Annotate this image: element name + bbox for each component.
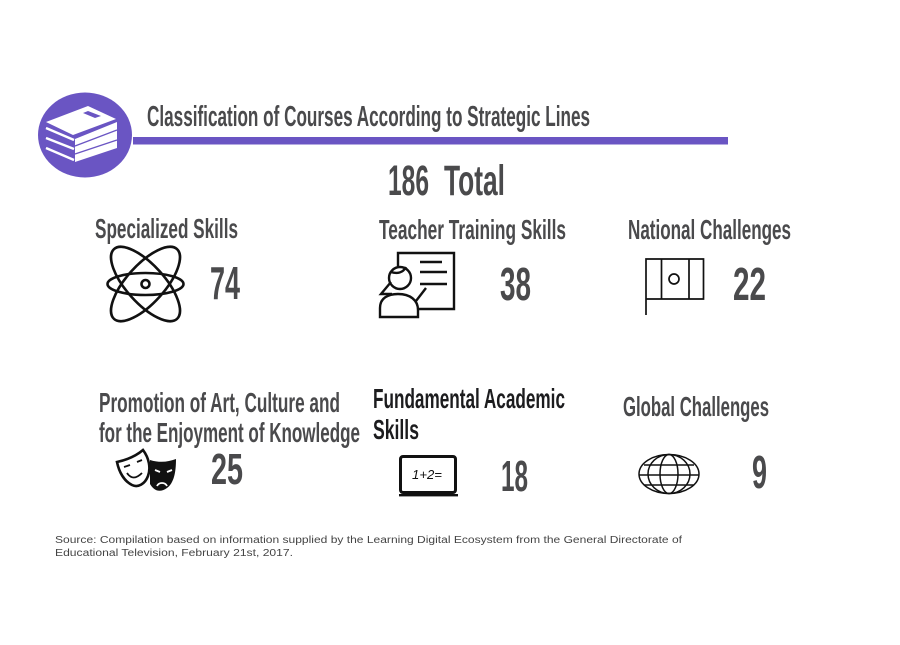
category label: Global Challenges — [623, 391, 769, 422]
value: 25 — [211, 445, 243, 494]
source note: Educational Television, February 21st, 2017. — [55, 548, 293, 559]
category label: Promotion of Art, Culture and — [99, 387, 340, 418]
icon: flag — [646, 259, 704, 315]
total count: Total — [444, 157, 505, 205]
category: fundamental academic skills — [373, 383, 565, 501]
value: 38 — [500, 258, 531, 310]
category label: National Challenges — [628, 214, 791, 245]
value: 18 — [501, 452, 528, 501]
icon: atom — [100, 236, 191, 332]
total count — [388, 157, 505, 205]
source note: Source: Compilation based on information supplied by the Learning Digital Ecosystem from the General Directorate of — [55, 535, 682, 546]
value: 22 — [733, 258, 766, 310]
icon: globe — [639, 454, 699, 494]
icon: chalkboard: 1+2= — [412, 467, 442, 482]
category: national challenges — [628, 214, 791, 315]
icon: stack of books — [38, 92, 132, 178]
category: specialized skills — [95, 213, 240, 332]
value: 74 — [210, 257, 240, 309]
category label: Fundamental Academic — [373, 383, 565, 414]
category label: Specialized Skills — [95, 213, 238, 244]
value: 9 — [752, 446, 767, 498]
total count: 186 — [388, 157, 429, 205]
category: teacher training skills — [379, 214, 566, 317]
heading rule — [133, 137, 728, 144]
category label: for the Enjoyment of Knowledge — [99, 417, 360, 448]
icon: theatre masks — [117, 450, 176, 491]
title: Classification of Courses According to Strategic Lines — [147, 101, 590, 133]
category label: Skills — [373, 414, 419, 445]
category: promotion of art and culture — [99, 387, 360, 494]
icon: teacher at board — [380, 253, 454, 317]
category: global challenges — [623, 391, 769, 498]
category label: Teacher Training Skills — [379, 214, 566, 245]
icon: chalkboard — [399, 456, 458, 496]
